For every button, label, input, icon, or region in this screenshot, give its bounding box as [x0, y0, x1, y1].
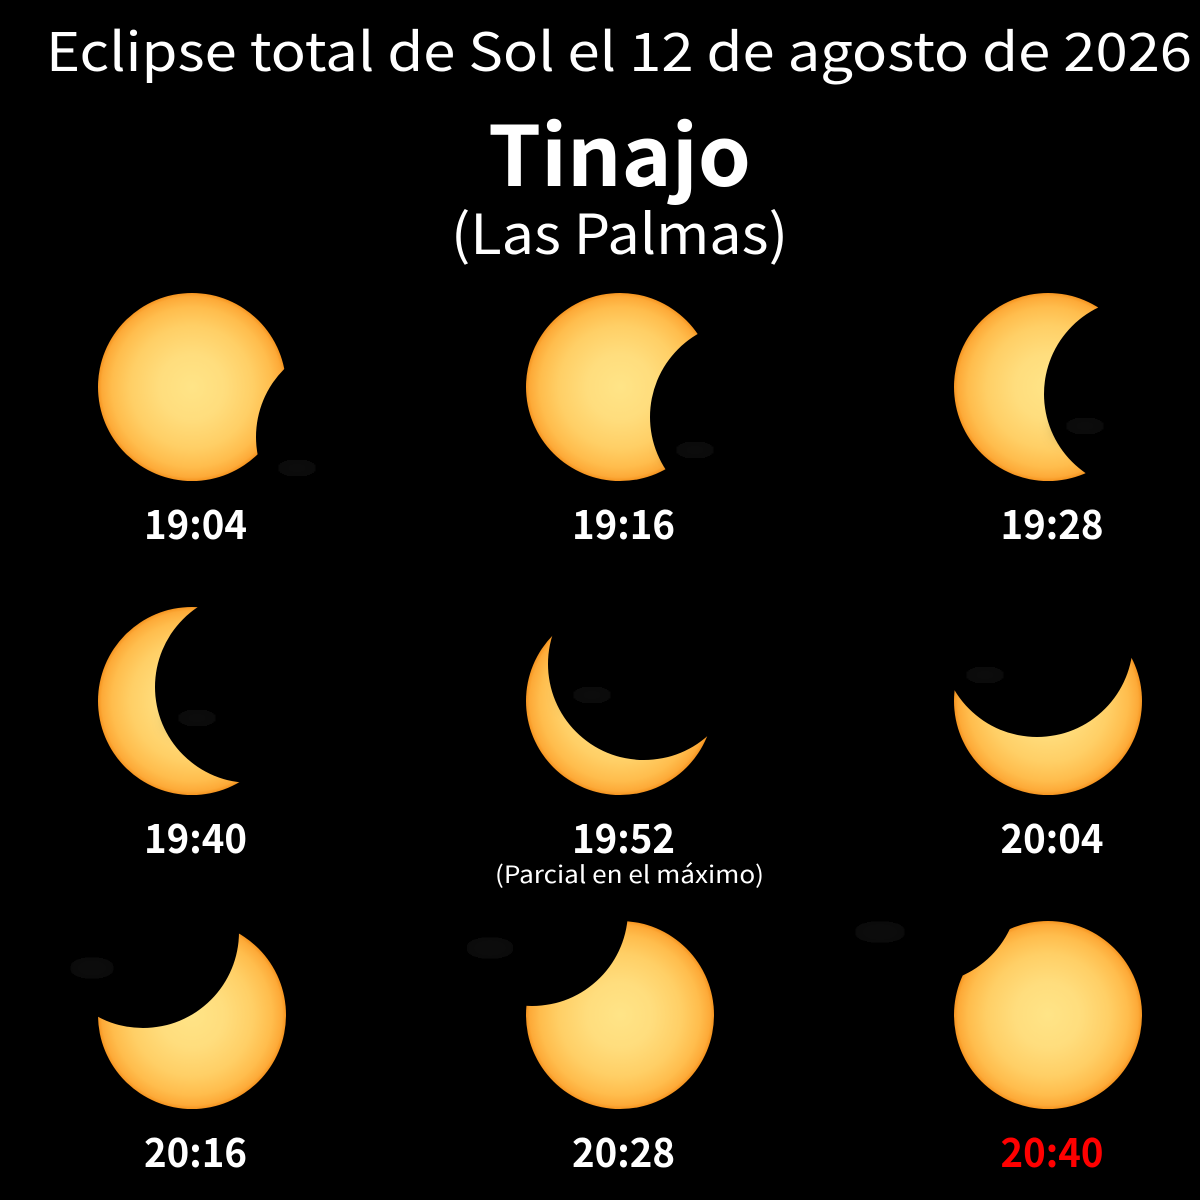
eclipse phase 20:04	[954, 658, 1142, 854]
eclipse phase 20:16	[70, 934, 286, 1168]
eclipse phase 20:40	[856, 921, 1142, 1168]
eclipse phase 19:28	[954, 293, 1104, 540]
eclipse phase 20:04: 20:04	[1000, 807, 1104, 865]
eclipse phase 19:52 with note: 19:52	[572, 807, 675, 865]
title: Eclipse total de Sol el 12 de agosto de 2026	[46, 11, 1192, 87]
eclipse phase 19:16	[526, 293, 714, 540]
eclipse phase 19:52 with note	[497, 636, 762, 888]
heading: Tinajo: Tinajo	[488, 90, 751, 210]
note: partial at maximum: (Parcial en el máximo)	[495, 855, 764, 890]
eclipse phase 19:40	[98, 607, 246, 854]
eclipse phase 20:40: 20:40	[1000, 1121, 1104, 1179]
eclipse phase 19:04: 19:04	[144, 493, 247, 551]
eclipse phase 20:28: 20:28	[572, 1121, 675, 1179]
eclipse phase 20:28	[467, 921, 714, 1168]
subheading: Las Palmas: (Las Palmas)	[451, 190, 788, 270]
eclipse phase 19:40: 19:40	[144, 807, 247, 865]
eclipse phase 19:28: 19:28	[1000, 493, 1104, 551]
eclipse phase 19:04	[98, 293, 316, 540]
eclipse phase 19:16: 19:16	[572, 493, 675, 551]
eclipse phase 20:16: 20:16	[144, 1121, 247, 1179]
